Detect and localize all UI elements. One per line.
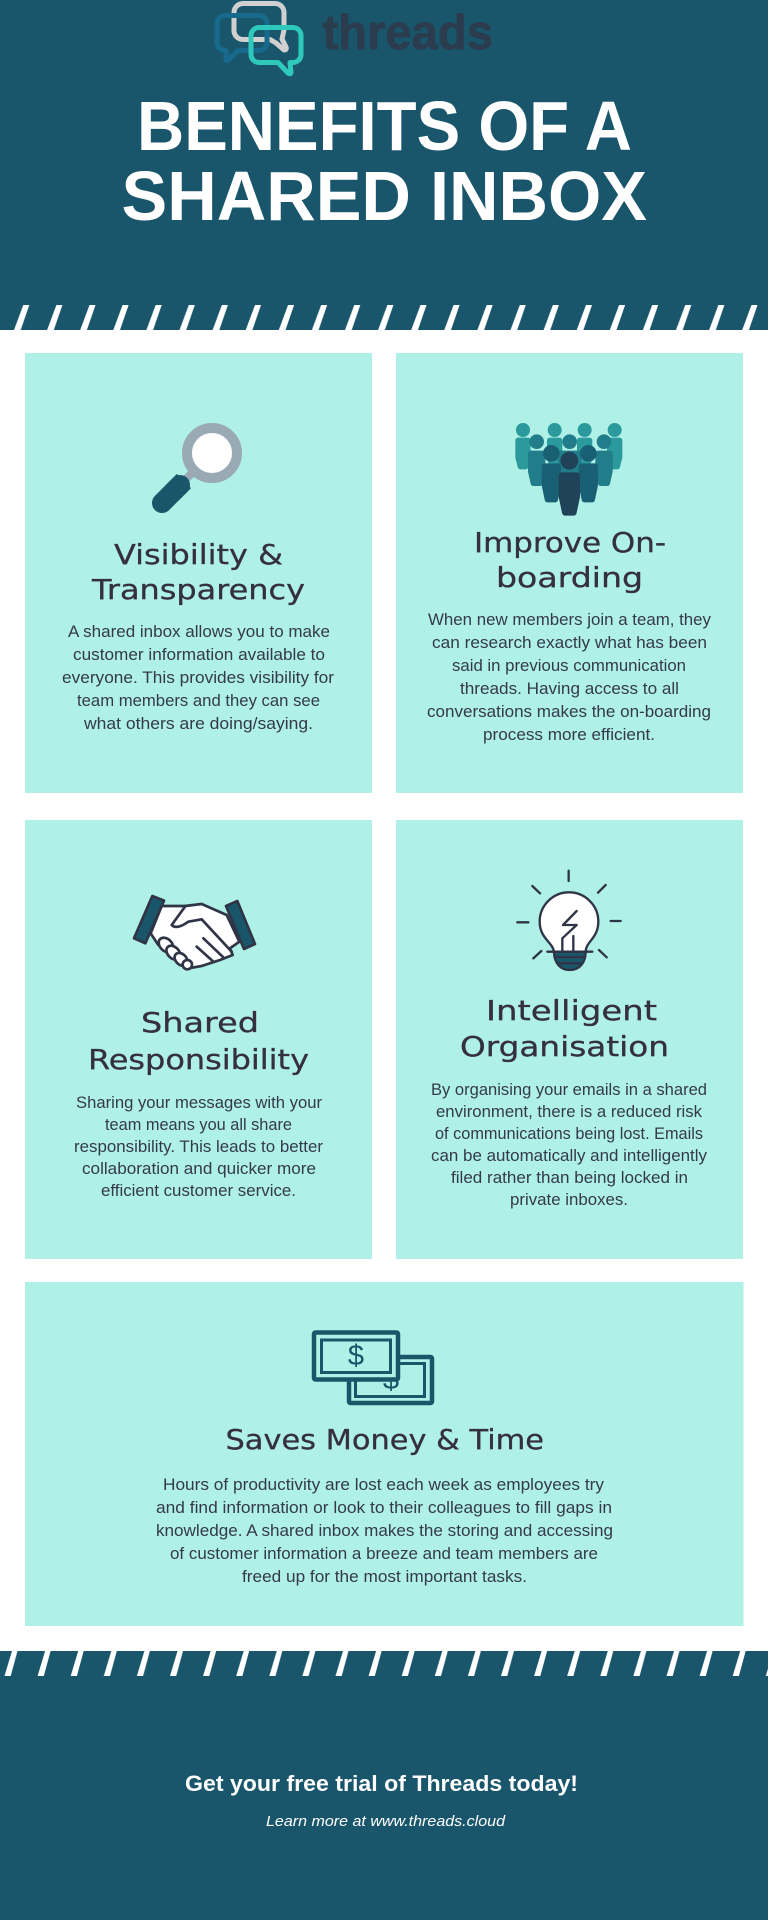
logo	[217, 4, 493, 74]
call to action: Get your free trial of Threads today!	[185, 1771, 578, 1796]
icon: banknotes: $	[348, 1340, 364, 1372]
body text: team members and they can see	[77, 691, 320, 710]
body text: environment, there is a reduced risk	[436, 1102, 702, 1121]
heading	[91, 538, 305, 606]
logo wordmark: threads	[322, 6, 493, 60]
panel: saves money and time	[25, 1282, 744, 1626]
body text: process more efficient.	[483, 725, 655, 744]
body text: what others are doing/saying.	[83, 714, 313, 733]
body text: can be automatically and intelligently	[431, 1146, 707, 1165]
body text	[156, 1475, 613, 1586]
panel: visibility and transparency	[25, 353, 372, 793]
body text: freed up for the most important tasks.	[242, 1567, 527, 1586]
icon: magnifying glass	[162, 428, 237, 503]
heading: Shared	[141, 1006, 259, 1039]
panel: intelligent organisation	[396, 820, 743, 1259]
body text: and find information or look to their colleagues to fill gaps in	[156, 1498, 612, 1517]
heading: Organisation	[460, 1030, 669, 1063]
icon: banknotes: $	[383, 1364, 399, 1396]
body text: threads. Having access to all	[460, 679, 679, 698]
website link: Learn more at www.threads.cloud	[266, 1813, 506, 1830]
icon: group of people	[518, 426, 620, 512]
heading: Intelligent	[486, 994, 657, 1027]
body text: team means you all share	[105, 1115, 292, 1134]
body text: everyone. This provides visibility for	[62, 668, 334, 687]
body text: responsibility. This leads to better	[74, 1137, 323, 1156]
body text	[62, 622, 334, 733]
body text: customer information available to	[73, 645, 325, 664]
heading: Saves Money & Time	[226, 1423, 544, 1456]
body text: can research exactly what has been	[432, 633, 707, 652]
panel: shared responsibility	[25, 820, 372, 1259]
body text: of customer information a breeze and team members are	[170, 1544, 598, 1563]
body text: Sharing your messages with your	[76, 1093, 322, 1112]
title: BENEFITS OF A	[137, 87, 632, 165]
body text: collaboration and quicker more	[82, 1159, 316, 1178]
body text: conversations makes the on-boarding	[427, 702, 711, 721]
body text: A shared inbox allows you to make	[68, 622, 330, 641]
body text: private inboxes.	[510, 1190, 628, 1209]
body text: knowledge. A shared inbox makes the storing and accessing	[156, 1521, 613, 1540]
body text: By organising your emails in a shared	[431, 1080, 707, 1099]
icon: banknotes	[314, 1332, 432, 1403]
heading: Improve On-	[474, 526, 666, 559]
heading: Transparency	[91, 573, 305, 606]
heading: Visibility &	[114, 538, 283, 571]
title: SHARED INBOX	[122, 157, 647, 235]
body text: filed rather than being locked in	[451, 1168, 688, 1187]
heading	[88, 1006, 309, 1076]
icon: handshake	[134, 896, 255, 969]
body text: said in previous communication	[452, 656, 686, 675]
header band	[0, 0, 768, 330]
heading: Responsibility	[88, 1043, 309, 1076]
body text: Hours of productivity are lost each week as employees try	[163, 1475, 605, 1494]
heading: boarding	[496, 561, 643, 594]
body text	[74, 1093, 323, 1200]
body text: efficient customer service.	[101, 1181, 296, 1200]
icon: light bulb	[517, 871, 621, 970]
icon: chat bubbles	[217, 4, 301, 74]
body text	[427, 610, 711, 744]
heading	[474, 526, 666, 594]
body text: of communications being lost. Emails	[435, 1124, 703, 1143]
heading	[460, 994, 669, 1063]
footer band	[0, 1651, 768, 1920]
panel: improve on-boarding	[396, 353, 743, 793]
title	[122, 87, 647, 235]
body text	[431, 1080, 707, 1209]
body text: When new members join a team, they	[428, 610, 711, 629]
